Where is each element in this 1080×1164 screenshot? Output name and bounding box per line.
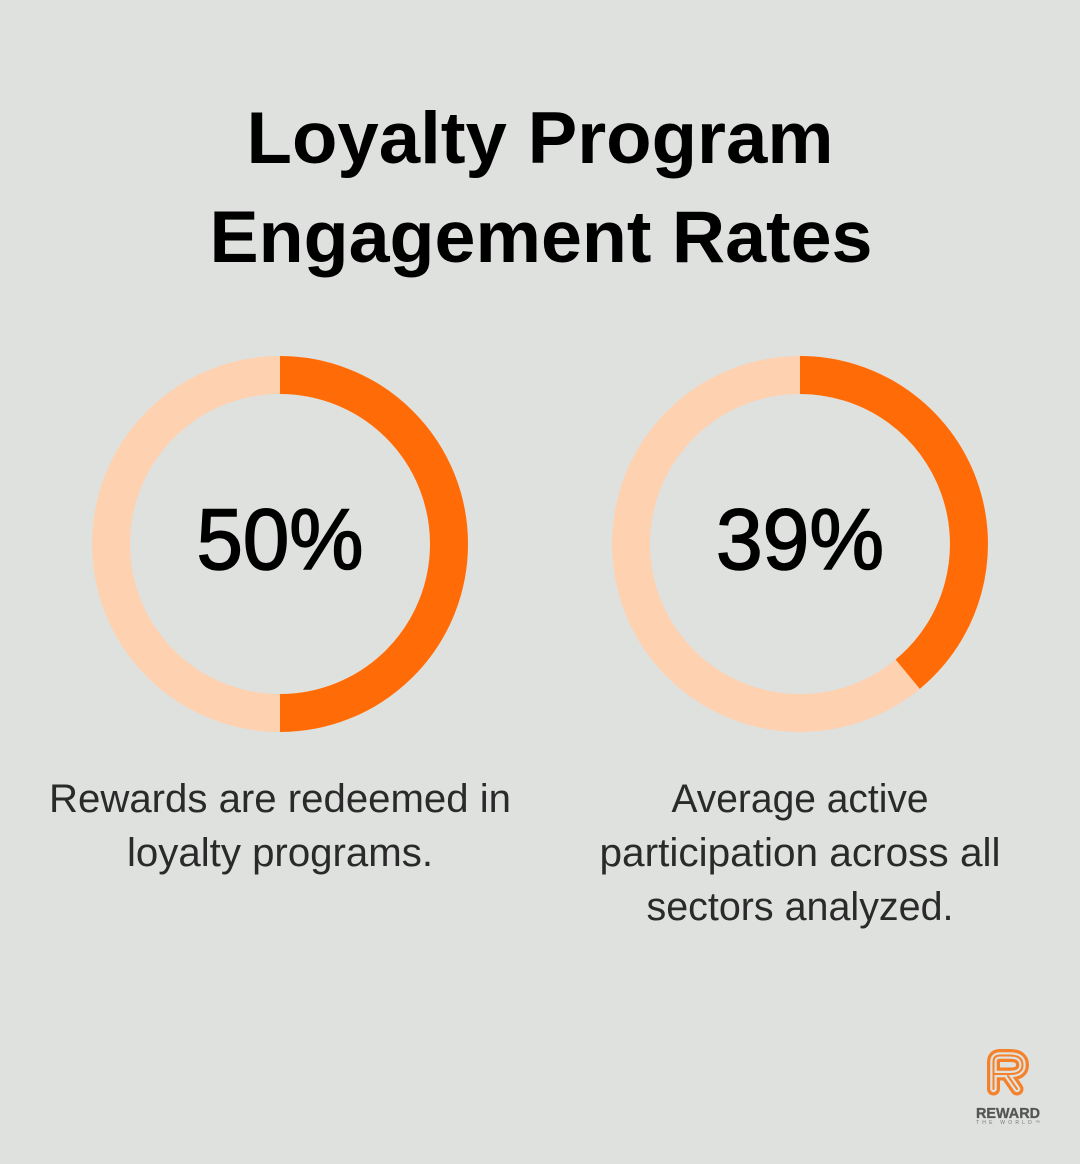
logo: Reward the World: [976, 1056, 1040, 1126]
description: rewards redeemed: Rewards are redeemed in: [49, 777, 511, 821]
donut chart: 50%: [111, 375, 449, 713]
title: [210, 98, 872, 278]
logo wordmark: REWARD: [976, 1105, 1040, 1122]
logo tagline: THE WORLD™: [976, 1120, 1040, 1126]
description: average participation: Average active: [672, 777, 928, 821]
panel: 39% stat: [600, 375, 1000, 929]
description: rewards redeemed: loyalty programs.: [127, 831, 433, 875]
donut chart: 39%: [631, 375, 969, 713]
title: Loyalty Program: [246, 98, 834, 179]
icon: R mark: [994, 1056, 1022, 1089]
panel: 50% stat: [49, 375, 511, 875]
description: average participation: [600, 777, 1000, 929]
description: average participation: sectors analyzed.: [646, 885, 954, 929]
value: 39%: 39%: [716, 492, 884, 588]
title: Engagement Rates: [210, 197, 872, 278]
value: 50%: 50%: [196, 492, 364, 588]
description: rewards redeemed: [49, 777, 511, 875]
description: average participation: participation across all: [600, 831, 1000, 875]
